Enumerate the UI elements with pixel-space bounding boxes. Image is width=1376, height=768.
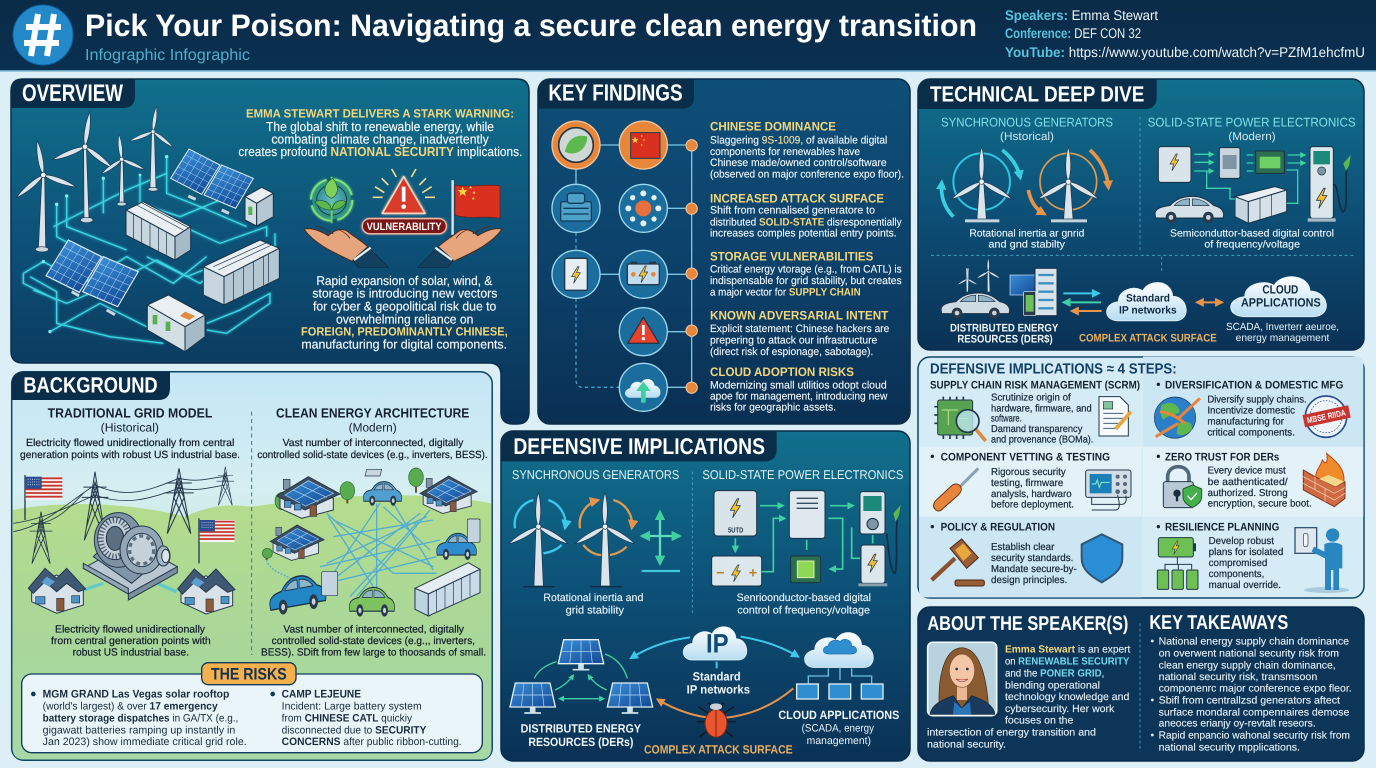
finding 2 text: distributed SOLID-STATE disresponentially	[710, 216, 902, 228]
step: supply chain risk management: software.	[991, 413, 1022, 424]
icon: warning triangle	[373, 169, 435, 213]
panel: about the speaker and key takeaways	[918, 607, 1364, 761]
heading: overview: OVERVIEW	[22, 80, 123, 107]
column: traditional grid heading: Electricity flowed unidirectionally from central	[26, 437, 234, 448]
icon: attack surface burst	[619, 184, 667, 232]
synchronous generators historical: Rotational inertia ar gnrid	[969, 227, 1084, 239]
caption: traditional grid: from central generation points with	[51, 635, 211, 646]
finding 5 text: risks for geographic assets.	[710, 401, 836, 413]
risk: MGM Grand: battery storage dispatches in GA/TX (e.g.,	[43, 712, 238, 724]
cloud: standard IP networks: IP networks	[1119, 304, 1177, 316]
portrait: Emma Stewart	[928, 642, 997, 716]
icon: document and pencil	[1099, 397, 1131, 436]
heading: key findings: KEY FINDINGS	[548, 80, 683, 106]
step: diversification	[1154, 378, 1351, 438]
cloud applications: management)	[807, 734, 871, 746]
solid-state electronics modern: (Modern)	[1228, 130, 1276, 143]
trees	[262, 468, 423, 560]
heading: defensive implications: DEFENSIVE IMPLICATIONS	[513, 434, 765, 459]
icon: globe with arrows	[1154, 397, 1200, 438]
solid-state electronics modern: Semiconduttor-based digital control	[1170, 227, 1334, 239]
synchronous generators historical: (Hstorical)	[1000, 130, 1054, 143]
step: component vetting: Rigorous security	[991, 466, 1066, 477]
speaker bio: focuses on the	[1005, 714, 1073, 726]
distributed energy resources: DISTRIBUTED ENERGY	[950, 322, 1058, 334]
icon: grid stability arrows	[642, 512, 680, 571]
icon: warning	[619, 308, 667, 356]
icon: open hands	[304, 226, 502, 267]
component flow diagram: 5UTD	[728, 526, 743, 534]
warning text block: EMMA STEWART DELIVERS A STARK WARNING:	[246, 107, 514, 120]
ground hills	[13, 495, 491, 759]
key takeaways list: componenrc major conference expo fleor.	[1159, 682, 1352, 694]
icon: hash logo	[13, 5, 73, 65]
panel: defensive implications 4 steps	[918, 357, 1364, 598]
badge: vulnerability: VULNERABILITY	[367, 220, 442, 232]
icon: person at switch	[1295, 528, 1349, 593]
finding 1 text: CHINESE DOMINANCE	[710, 120, 836, 133]
key takeaways list: national security mpplications.	[1159, 741, 1300, 753]
risk: Camp Lejeune: CAMP LEJEUNE	[282, 687, 361, 700]
risk text block: for cyber & geopolitical risk due to	[313, 300, 496, 314]
step: supply chain risk management	[930, 378, 1140, 445]
key takeaways list: surface mondaral compennaires demose	[1159, 706, 1349, 718]
synchronous generators column: SYNCHRONOUS GENERATORS	[512, 468, 679, 482]
key takeaways list: on overwent national security risk from	[1159, 647, 1339, 659]
solid-state electronics column: control of frequency/voltage	[737, 604, 870, 616]
step: diversification: DIVERSIFICATION & DOMESTIC MFG	[1165, 378, 1343, 391]
wind turbines	[6, 104, 179, 252]
step: zero trust: ZERO TRUST FOR DERs	[1165, 450, 1279, 463]
risk: MGM Grand: gigawatt batteries ramping up instantly in	[43, 724, 235, 736]
subtitle: Infographic Infographic	[85, 47, 250, 64]
key takeaways list: Sbifl from centrallzsd generators aftect	[1159, 694, 1340, 706]
label: complex attack surface: COMPLEX ATTACK SURFACE	[644, 742, 793, 756]
speaker bio: cybersecurity. Her work	[1005, 703, 1114, 714]
warning text block	[238, 107, 522, 159]
talk metadata: YouTube: https://www.youtube.com/watch?v=PZfM1ehcfmU	[1005, 44, 1365, 60]
column: clean energy heading: CLEAN ENERGY ARCHITECTURE	[276, 406, 469, 421]
central generator	[83, 513, 177, 600]
step: resilience planning: RESILIENCE PLANNING	[1165, 521, 1279, 533]
warning text block: combating climate change, inadvertently	[271, 132, 489, 146]
step: resilience planning: components,	[1209, 568, 1264, 579]
illustration: clean energy network	[262, 468, 480, 617]
cloud applications: CLOUD APPLICATIONS	[778, 708, 899, 722]
caption: traditional grid: robust US industrial base.	[73, 646, 189, 658]
step: zero trust: be aathenticated/	[1208, 476, 1288, 487]
key takeaways list	[1151, 635, 1352, 753]
distributed energy resources	[941, 258, 1058, 345]
title: Pick Your Poison: Navigating a secure clean energy transition	[85, 8, 977, 43]
heading: key takeaways: KEY TAKEAWAYS	[1149, 611, 1288, 633]
step: resilience planning	[1157, 521, 1349, 593]
icon: screwdriver	[933, 468, 978, 511]
panel: overview	[6, 79, 529, 424]
cloud applications: (SCADA, energy	[802, 722, 874, 734]
icon: storage unit	[552, 250, 600, 298]
battery container	[415, 563, 480, 616]
icon: rotating turbines	[941, 147, 1108, 222]
cloud: IP networks: IP networks	[687, 682, 750, 696]
heading: technical deep dive: TECHNICAL DEEP DIVE	[930, 82, 1144, 106]
key takeaways list: Rapid enpancio wahonal security risk from	[1159, 729, 1350, 741]
step: zero trust: Every device must	[1208, 465, 1286, 476]
column: traditional grid heading: generation points with robust US industrial base.	[20, 449, 240, 460]
panel: technical deep dive	[918, 79, 1364, 350]
column: clean energy heading	[257, 406, 488, 460]
finding 4 text: Explicit statement: Chinese hackers are	[710, 322, 889, 334]
finding 1 text	[710, 120, 904, 180]
cloud: applications: CLOUD	[1262, 282, 1298, 296]
step: component vetting: testing, firmware	[991, 477, 1063, 488]
icon: flag of china	[619, 121, 667, 169]
label: complex attack surface: COMPLEX ATTACK SURFACE	[1079, 332, 1217, 344]
step: policy and regulation: security standards.	[991, 552, 1073, 563]
warning text block: creates profound NATIONAL SECURITY implications.	[238, 145, 522, 159]
synchronous generators column	[507, 468, 680, 616]
finding 5 text	[710, 365, 888, 413]
speaker bio: blending operational	[1005, 679, 1100, 691]
risk text block: manufacturing for digital components.	[301, 338, 507, 352]
icon: made in USA stamp: MBSE RIIDA	[1306, 407, 1347, 425]
synchronous generators column: grid stability	[566, 604, 624, 616]
risk text block: storage is introducing new vectors	[312, 287, 497, 301]
icon: connected device	[552, 184, 600, 232]
cloud: applications: SCADA, Inverterr aeuroe,	[1226, 321, 1339, 332]
step: supply chain risk management: SUPPLY CHAIN RISK MANAGEMENT (SCRM)	[930, 378, 1140, 391]
step: diversification: Incentivize domestic	[1207, 405, 1295, 416]
cloud: applications: energy management	[1236, 332, 1329, 343]
speaker bio: on RENEWABLE SECURITY	[1005, 655, 1129, 667]
box: the risks	[22, 663, 482, 753]
speaker bio: Emma Stewart is an expert	[1005, 643, 1130, 655]
finding 1 text: Chinese made/owned control/software	[710, 156, 887, 168]
column: traditional grid heading: TRADITIONAL GRID MODEL	[48, 406, 212, 421]
cloud: applications: APPLICATIONS	[1241, 296, 1321, 309]
icon: battery bank	[1157, 538, 1198, 589]
heading: about the speaker: ABOUT THE SPEAKER(S)	[927, 612, 1128, 634]
heading: 4 steps: DEFENSIVE IMPLICATIONS ≈ 4 STEPS:	[930, 360, 1177, 377]
caption: clean energy: Vast number of interconnected, digitally	[283, 623, 464, 635]
solar houses	[270, 476, 477, 560]
key takeaways list: national security risk, transmsoon	[1159, 671, 1317, 682]
synchronous generators historical: SYNCHRONOUS GENERATORS	[941, 116, 1113, 130]
panel: defensive implications	[501, 431, 910, 761]
heading: background: BACKGROUND	[23, 373, 158, 397]
risk text block: Rapid expansion of solar, wind, &	[316, 274, 492, 288]
icon: firewall with flame	[1303, 453, 1345, 507]
step: supply chain risk management: Damand transparency	[991, 423, 1082, 434]
caption: clean energy: controlled solid-state devices (e.g.,, inverters,	[272, 635, 475, 646]
synchronous generators column: Rotational inertia and	[543, 591, 643, 603]
risk: Camp Lejeune	[270, 687, 462, 747]
illustration: traditional grid	[13, 467, 235, 614]
step: zero trust: authorized. Strong	[1208, 487, 1288, 498]
step: policy and regulation: Mandate secure-by-	[991, 563, 1077, 574]
finding 2 text: increases comples potential entry points.	[710, 227, 897, 239]
risk: MGM Grand: MGM GRAND Las Vegas solar rooftop	[43, 687, 229, 700]
badge: the risks: THE RISKS	[211, 664, 287, 683]
caption: clean energy	[261, 623, 486, 658]
key takeaways list: clean energy supply chain dominance,	[1159, 659, 1336, 671]
warning text block: The global shift to renewable energy, while	[266, 120, 494, 134]
finding 4 text	[710, 308, 889, 357]
solid-state electronics column: Senrioonductor-based digital	[737, 591, 871, 603]
cloud: IP networks	[683, 627, 750, 696]
icon: circuit board with magnifier	[934, 397, 986, 441]
column: clean energy heading: Vast number of interconnected, digitally	[283, 437, 463, 448]
finding 2 text: INCREASED ATTACK SURFACE	[710, 191, 884, 205]
risk: Camp Lejeune: disconnected due to SECURITY	[282, 724, 426, 736]
distributed energy resources: RESOURCES (DER$)	[957, 333, 1053, 345]
column: traditional grid heading	[20, 406, 240, 460]
cloud: IP networks: IP	[706, 629, 729, 658]
step: policy and regulation	[931, 521, 1122, 586]
finding 2 text	[710, 191, 902, 239]
synchronous generators historical: and gnd stabilty	[988, 238, 1065, 250]
risk text block: overwhelming reliance on	[336, 312, 473, 326]
header bar	[0, 0, 1376, 72]
finding 1 text: Slaggering 9S-1009, of available digital	[710, 134, 887, 146]
icon: chinese flag	[451, 180, 500, 235]
finding 5 text: Modernizing small utilitios odopt cloud	[710, 379, 887, 391]
finding 3 text: indispensable for grid stability, but creates	[710, 274, 902, 286]
icon: padlock and shield	[1163, 467, 1202, 508]
risk: MGM Grand	[31, 687, 247, 747]
key takeaways list: aneoces erianjy oy-revtalt reseors.	[1159, 717, 1316, 729]
finding 5 text: apoe for management, introducing new	[710, 390, 888, 402]
icon: gavel	[932, 539, 984, 586]
talk metadata: Speakers: Emma Stewart	[1005, 7, 1158, 23]
finding 1 text: components for renewables have	[710, 145, 860, 157]
solid-state electronics modern: SOLID-STATE POWER ELECTRONICS	[1148, 116, 1356, 130]
finding 5 text: CLOUD ADOPTION RISKS	[710, 365, 854, 379]
icon: wind turbines with rotation	[507, 492, 636, 587]
icon: cloud upload	[619, 363, 667, 411]
solar panels	[46, 149, 253, 315]
step: policy and regulation: Establish clear	[991, 541, 1054, 552]
step: resilience planning: Develop robust	[1209, 535, 1274, 546]
distributed energy resources: DISTRIBUTED ENERGY	[521, 721, 641, 735]
finding 4 text: KNOWN ADVERSARIAL INTENT	[710, 308, 888, 322]
dot row markers	[686, 140, 697, 393]
step: resilience planning: plans for isolated	[1209, 546, 1283, 557]
finding 3 text	[710, 250, 902, 298]
step: diversification: manufacturing for	[1207, 416, 1284, 427]
illustration: wind, solar and storage network	[6, 104, 279, 352]
icon: battery	[619, 250, 667, 298]
risk text block: FOREIGN, PREDOMINANTLY CHINESE,	[301, 325, 508, 338]
icon: oscilloscope	[1086, 470, 1131, 510]
synchronous generators historical	[941, 116, 1113, 250]
talk metadata	[1005, 7, 1365, 60]
step: supply chain risk management: hardware, firmware, and	[991, 403, 1092, 414]
finding 1 text: (observed on major conference expo floor).	[710, 168, 904, 180]
caption: traditional grid	[51, 623, 211, 658]
component flow diagram	[712, 491, 901, 586]
step: diversification: Diversify supply chains.	[1207, 394, 1307, 405]
solid-state electronics column	[702, 468, 903, 616]
finding 2 text: Shift from cennalised generatore to	[710, 204, 875, 216]
caption: traditional grid: Electricity flowed unidirectionally	[55, 623, 205, 635]
solid-state electronics modern	[1148, 116, 1356, 250]
icon: shield	[1082, 534, 1122, 582]
talk metadata: Conference: DEF CON 32	[1005, 25, 1141, 41]
icon: plant seedling	[311, 177, 352, 223]
risk: MGM Grand: Jan 2023) show immediate critical grid role.	[43, 735, 247, 747]
solid-state electronics column: SOLID-STATE POWER ELECTRONICS	[702, 468, 903, 482]
battery containers	[126, 187, 279, 352]
finding 4 text: prepering to attack our infrastructure	[710, 334, 877, 346]
icon: made in USA stamp	[1302, 396, 1351, 437]
risk: Camp Lejeune: Incident: Large battery system	[282, 700, 422, 712]
speaker bio: and the PONER GRID,	[1005, 667, 1104, 679]
distributed energy resources	[510, 640, 653, 749]
step: resilience planning: compromised	[1209, 557, 1267, 568]
step: zero trust: encryption, secure boot.	[1208, 498, 1312, 509]
step: zero trust	[1157, 450, 1345, 509]
risk: Camp Lejeune: CONCERNS after public ribbon-cutting.	[282, 735, 462, 747]
risk text block	[301, 274, 508, 352]
column: traditional grid heading: (Historical)	[101, 421, 159, 434]
finding 3 text: a major vector for SUPPLY CHAIN	[710, 286, 861, 298]
step: diversification: critical components.	[1207, 427, 1295, 438]
device chain	[1155, 147, 1351, 223]
step: supply chain risk management: Scrutinize origin of	[991, 392, 1071, 403]
houses	[28, 568, 235, 614]
connector lines	[576, 145, 692, 387]
speaker bio: intersection of energy transition and	[927, 726, 1096, 738]
cloud: standard IP networks	[1107, 283, 1186, 321]
step: component vetting	[931, 450, 1131, 511]
step: policy and regulation: design principles.	[991, 574, 1067, 585]
key takeaways list: National energy supply chain dominance	[1159, 635, 1349, 647]
icon: US flags	[25, 475, 234, 563]
finding 3 text: Criticaf energy vtorage (e.g., from CATL) is	[710, 263, 902, 275]
column: clean energy heading: (Modern)	[349, 421, 397, 434]
step: supply chain risk management: and provenance (BOMa).	[991, 434, 1093, 445]
cloud: applications	[1226, 277, 1339, 343]
network arcs	[631, 637, 798, 718]
EVs and chargers	[268, 469, 480, 617]
speaker bio	[927, 643, 1130, 750]
step: component vetting: analysls, hardwaro	[991, 488, 1072, 499]
cloud applications	[778, 633, 899, 746]
solid-state electronics modern: of frequency/voltage	[1204, 238, 1300, 250]
risk: Camp Lejeune: from CHINESE CATL quickiy	[282, 712, 412, 724]
icon: bug	[697, 703, 736, 737]
step: resilience planning: manual override.	[1209, 579, 1281, 590]
speaker bio: national security.	[927, 738, 1006, 750]
cloud: standard IP networks: Standard	[1126, 292, 1170, 304]
speaker bio: technology knowledge and	[1005, 691, 1129, 702]
caption: clean energy: BESS). SDift from few large to thoosands of small.	[261, 646, 486, 658]
column: clean energy heading: controlled solid-state devices (e.g., inverters, BESS).	[257, 449, 488, 460]
panel: background	[12, 372, 492, 760]
panel: key findings	[538, 79, 910, 424]
flow arrows	[1063, 293, 1222, 311]
step: policy and regulation: POLICY & REGULATION	[941, 521, 1055, 533]
cloud: IP networks: Standard	[693, 670, 741, 683]
finding 3 text: STORAGE VULNERABILITIES	[710, 250, 873, 263]
icon: circular energy badge	[552, 121, 600, 169]
finding 4 text: (direct risk of espionage, sabotage).	[710, 345, 873, 357]
risk: MGM Grand: (world's largest) & over 17 emergency	[43, 700, 218, 712]
step: component vetting: COMPONENT VETTING & TESTING	[941, 450, 1110, 463]
step: component vetting: before deployment.	[991, 499, 1074, 510]
distributed energy resources: RESOURCES (DERs)	[528, 735, 633, 749]
